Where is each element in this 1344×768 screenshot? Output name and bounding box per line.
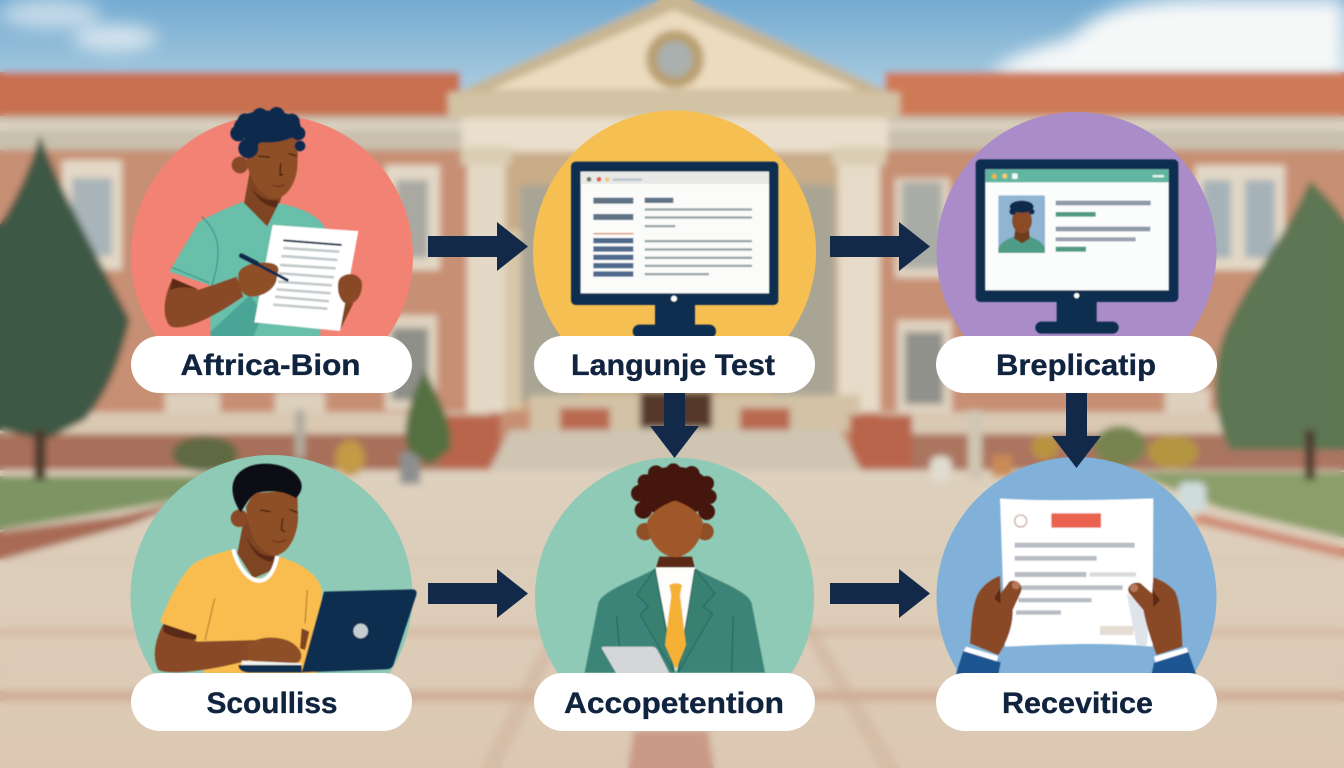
arrow: step 5 to step 6 bbox=[830, 569, 930, 618]
label: Breplicatip: Breplicatip bbox=[996, 349, 1156, 382]
circle: purple background bbox=[936, 112, 1216, 336]
circle: coral background bbox=[131, 118, 413, 336]
panel: step 3 Breplicatip bbox=[936, 112, 1216, 336]
icon: monitor with applicant profile bbox=[976, 159, 1178, 334]
label: Langunje Test bbox=[534, 336, 815, 393]
circle: mint background bbox=[535, 458, 814, 674]
label: Aftrica-Bion bbox=[131, 336, 412, 393]
label: Accopetention: Accopetention bbox=[564, 687, 784, 720]
panel: step 6 Recevitice bbox=[936, 457, 1216, 674]
arrow: step 3 down to step 6 bbox=[1052, 390, 1101, 468]
panel: step 1 Aftrica-Bion bbox=[131, 106, 413, 336]
icon: student signing a form bbox=[165, 107, 362, 337]
arrow: step 1 to step 2 bbox=[428, 222, 528, 271]
label: Recevitice bbox=[936, 673, 1217, 731]
circle: blue background bbox=[936, 457, 1216, 673]
label: Scoulliss bbox=[131, 673, 412, 731]
panel: step 4 Scoulliss bbox=[130, 455, 418, 674]
label: Breplicatip bbox=[936, 336, 1217, 393]
label: Aftrica-Bion: Aftrica-Bion bbox=[180, 349, 360, 382]
label: Accopetention bbox=[534, 673, 815, 731]
arrow: step 2 down to step 5 bbox=[650, 390, 699, 458]
icon: hands holding a letter bbox=[956, 498, 1196, 674]
icon: student on a laptop bbox=[155, 464, 417, 673]
label: Recevitice: Recevitice bbox=[1002, 687, 1153, 720]
panel: step 2 Language Test bbox=[533, 110, 816, 336]
circle: mint background bbox=[130, 455, 412, 674]
label: Langunje Test: Langunje Test bbox=[571, 349, 775, 382]
panel: step 5 Accopetention bbox=[535, 458, 814, 674]
icon: officer in a green suit bbox=[585, 463, 765, 674]
arrow: step 4 to step 5 bbox=[428, 569, 528, 618]
circle: yellow background bbox=[533, 110, 816, 336]
icon: monitor with test page bbox=[571, 162, 778, 338]
arrow: step 2 to step 3 bbox=[830, 222, 930, 271]
label: Scoulliss: Scoulliss bbox=[206, 687, 338, 720]
